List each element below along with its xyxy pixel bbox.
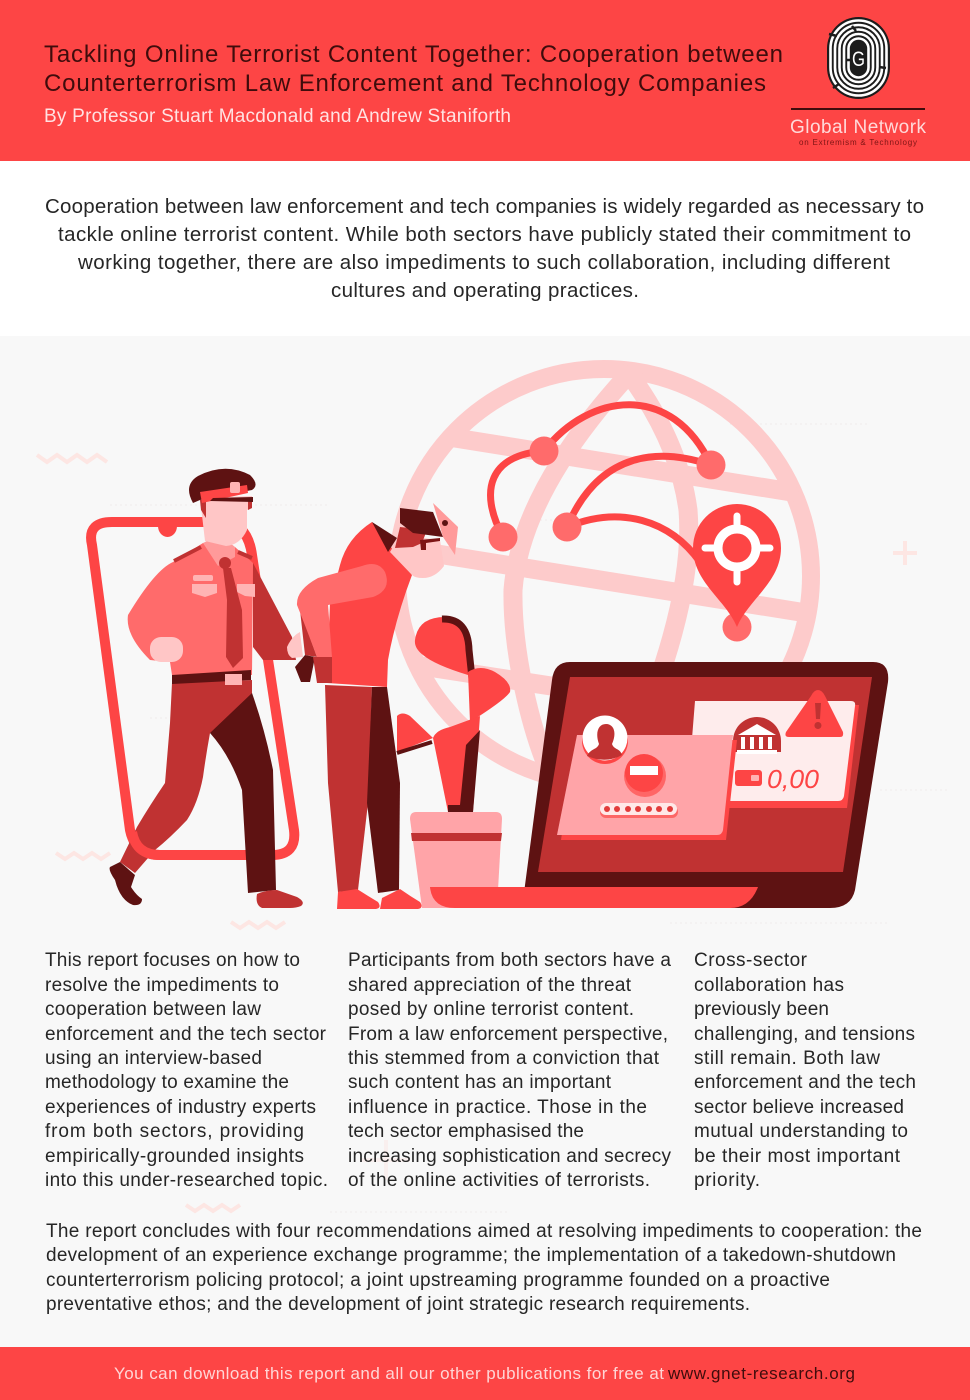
text column 2: posed by online terrorist content. xyxy=(348,999,634,1020)
icon: bank xyxy=(733,717,781,754)
logo: fingerprint: G xyxy=(852,48,865,71)
text column 1: resolve the impediments to xyxy=(45,975,279,996)
logo rule xyxy=(791,108,925,110)
officer hands xyxy=(150,632,303,662)
text column 1: This report focuses on how to xyxy=(45,950,300,971)
suspect body xyxy=(327,522,412,687)
text column 3: sector believe increased xyxy=(694,1097,904,1118)
icon: warning triangle xyxy=(785,690,843,737)
text column 3: enforcement and the tech xyxy=(694,1072,916,1093)
text column 2 xyxy=(348,950,672,1191)
title: Tackling Online Terrorist Content Together: Cooperation between xyxy=(44,41,783,68)
suspect cap xyxy=(400,503,458,555)
bank card xyxy=(687,701,859,808)
icon: wallet xyxy=(735,770,762,786)
password field xyxy=(600,803,678,818)
phone notch xyxy=(158,526,177,537)
suspect shoes xyxy=(337,889,422,909)
title: Counterterrorism Law Enforcement and Technology Companies xyxy=(44,70,766,97)
decorative faint marks xyxy=(37,424,950,1212)
officer belt xyxy=(172,670,251,685)
officer cap xyxy=(189,469,256,503)
download note: You can download this report and all our other publications for free at xyxy=(114,1364,664,1383)
logo wordmark: Global Network xyxy=(790,117,926,138)
icon: user avatar xyxy=(582,716,628,764)
text column 1: from both sectors, providing xyxy=(45,1121,304,1142)
intro text: cultures and operating practices. xyxy=(331,279,639,302)
laptop base xyxy=(430,887,758,908)
text column 2: increasing sophistication and secrecy xyxy=(348,1146,672,1167)
suspect legs xyxy=(325,685,400,893)
text column 3 xyxy=(694,950,916,1191)
text column 1: into this under-researched topic. xyxy=(45,1170,328,1191)
intro text xyxy=(45,195,924,302)
text column 3: priority. xyxy=(694,1170,760,1191)
text column 3: challenging, and tensions xyxy=(694,1024,915,1045)
text column 2: tech sector emphasised the xyxy=(348,1121,584,1142)
globe xyxy=(397,362,825,783)
logo strapline: on Extremism & Technology xyxy=(799,138,917,147)
suspect collar xyxy=(372,522,397,552)
text column 3: Cross-sector xyxy=(694,950,808,971)
text column 1: experiences of industry experts xyxy=(45,1097,316,1118)
text column 2: shared appreciation of the threat xyxy=(348,975,632,996)
pot xyxy=(410,812,502,908)
website link: www.gnet-research.org xyxy=(667,1364,855,1383)
conclusion paragraph: development of an experience exchange programme; the implementation of a takedown-shutdown xyxy=(46,1245,896,1266)
officer epaulettes xyxy=(174,547,252,561)
login card xyxy=(557,735,737,840)
text column 3: mutual understanding to xyxy=(694,1121,908,1142)
panel: illustration and body background xyxy=(0,336,970,1348)
police officer xyxy=(110,469,303,908)
potted plant xyxy=(397,617,510,908)
text column 1: enforcement and the tech sector xyxy=(45,1024,327,1045)
text column 1: empirically-grounded insights xyxy=(45,1146,304,1167)
header band xyxy=(0,0,970,161)
phone outline xyxy=(91,522,294,855)
conclusion paragraph: counterterrorism policing protocol; a joint upstreaming programme founded on a proactive xyxy=(46,1270,830,1291)
officer dark leg xyxy=(210,693,276,893)
text column 2: of the online activities of terrorists. xyxy=(348,1170,650,1191)
officer collar xyxy=(203,535,235,566)
leaves xyxy=(397,617,510,812)
authors: By Professor Stuart Macdonald and Andrew Staniforth xyxy=(44,106,511,127)
laptop xyxy=(430,662,888,908)
suspect arm xyxy=(297,564,387,657)
text column 2: From a law enforcement perspective, xyxy=(348,1024,668,1045)
intro text: tackle online terrorist content. While both sectors have publicly stated their commitment to xyxy=(58,223,911,246)
suspect in custody xyxy=(295,503,458,909)
conclusion paragraph: preventative ethos; and the development of joint strategic research requirements. xyxy=(46,1294,750,1315)
conclusion paragraph xyxy=(46,1221,922,1315)
officer right arm xyxy=(253,563,296,660)
icon: blocked sign xyxy=(624,754,666,797)
text column 2: Participants from both sectors have a xyxy=(348,950,671,971)
officer trousers xyxy=(120,680,252,873)
laptop screen xyxy=(538,677,872,872)
officer shirt xyxy=(128,543,253,675)
balance value: 0,00 xyxy=(767,764,820,794)
title xyxy=(44,41,783,97)
intro text: Cooperation between law enforcement and tech companies is widely regarded as necessary to xyxy=(45,195,924,218)
laptop body xyxy=(522,662,888,908)
text column 1: cooperation between law xyxy=(45,999,261,1020)
text column 1: using an interview-based xyxy=(45,1048,262,1069)
suspect hands xyxy=(295,655,332,683)
text column 3: still remain. Both law xyxy=(694,1048,880,1069)
footer band xyxy=(0,1347,970,1400)
network nodes xyxy=(488,436,752,642)
text column 1: methodology to examine the xyxy=(45,1072,289,1093)
text column 2: this stemmed from a conviction that xyxy=(348,1048,660,1069)
icon: location pin xyxy=(693,504,781,627)
logo: fingerprint xyxy=(827,17,890,99)
text column 3: previously been xyxy=(694,999,829,1020)
text column 2: influence in practice. Those in the xyxy=(348,1097,647,1118)
conclusion paragraph: The report concludes with four recommendations aimed at resolving impediments to cooperation: the xyxy=(46,1221,922,1242)
officer tie xyxy=(219,557,243,668)
text column 3: collaboration has xyxy=(694,975,844,996)
officer head xyxy=(200,496,252,546)
text column 1 xyxy=(45,950,328,1191)
text column 2: such content has an important xyxy=(348,1072,612,1093)
network arcs xyxy=(491,405,711,562)
officer pockets xyxy=(192,575,255,597)
suspect head xyxy=(390,527,444,578)
officer shoes xyxy=(110,862,303,908)
intro text: working together, there are also impediments to such collaboration, including different xyxy=(77,251,890,274)
text column 3: be their most important xyxy=(694,1146,901,1167)
